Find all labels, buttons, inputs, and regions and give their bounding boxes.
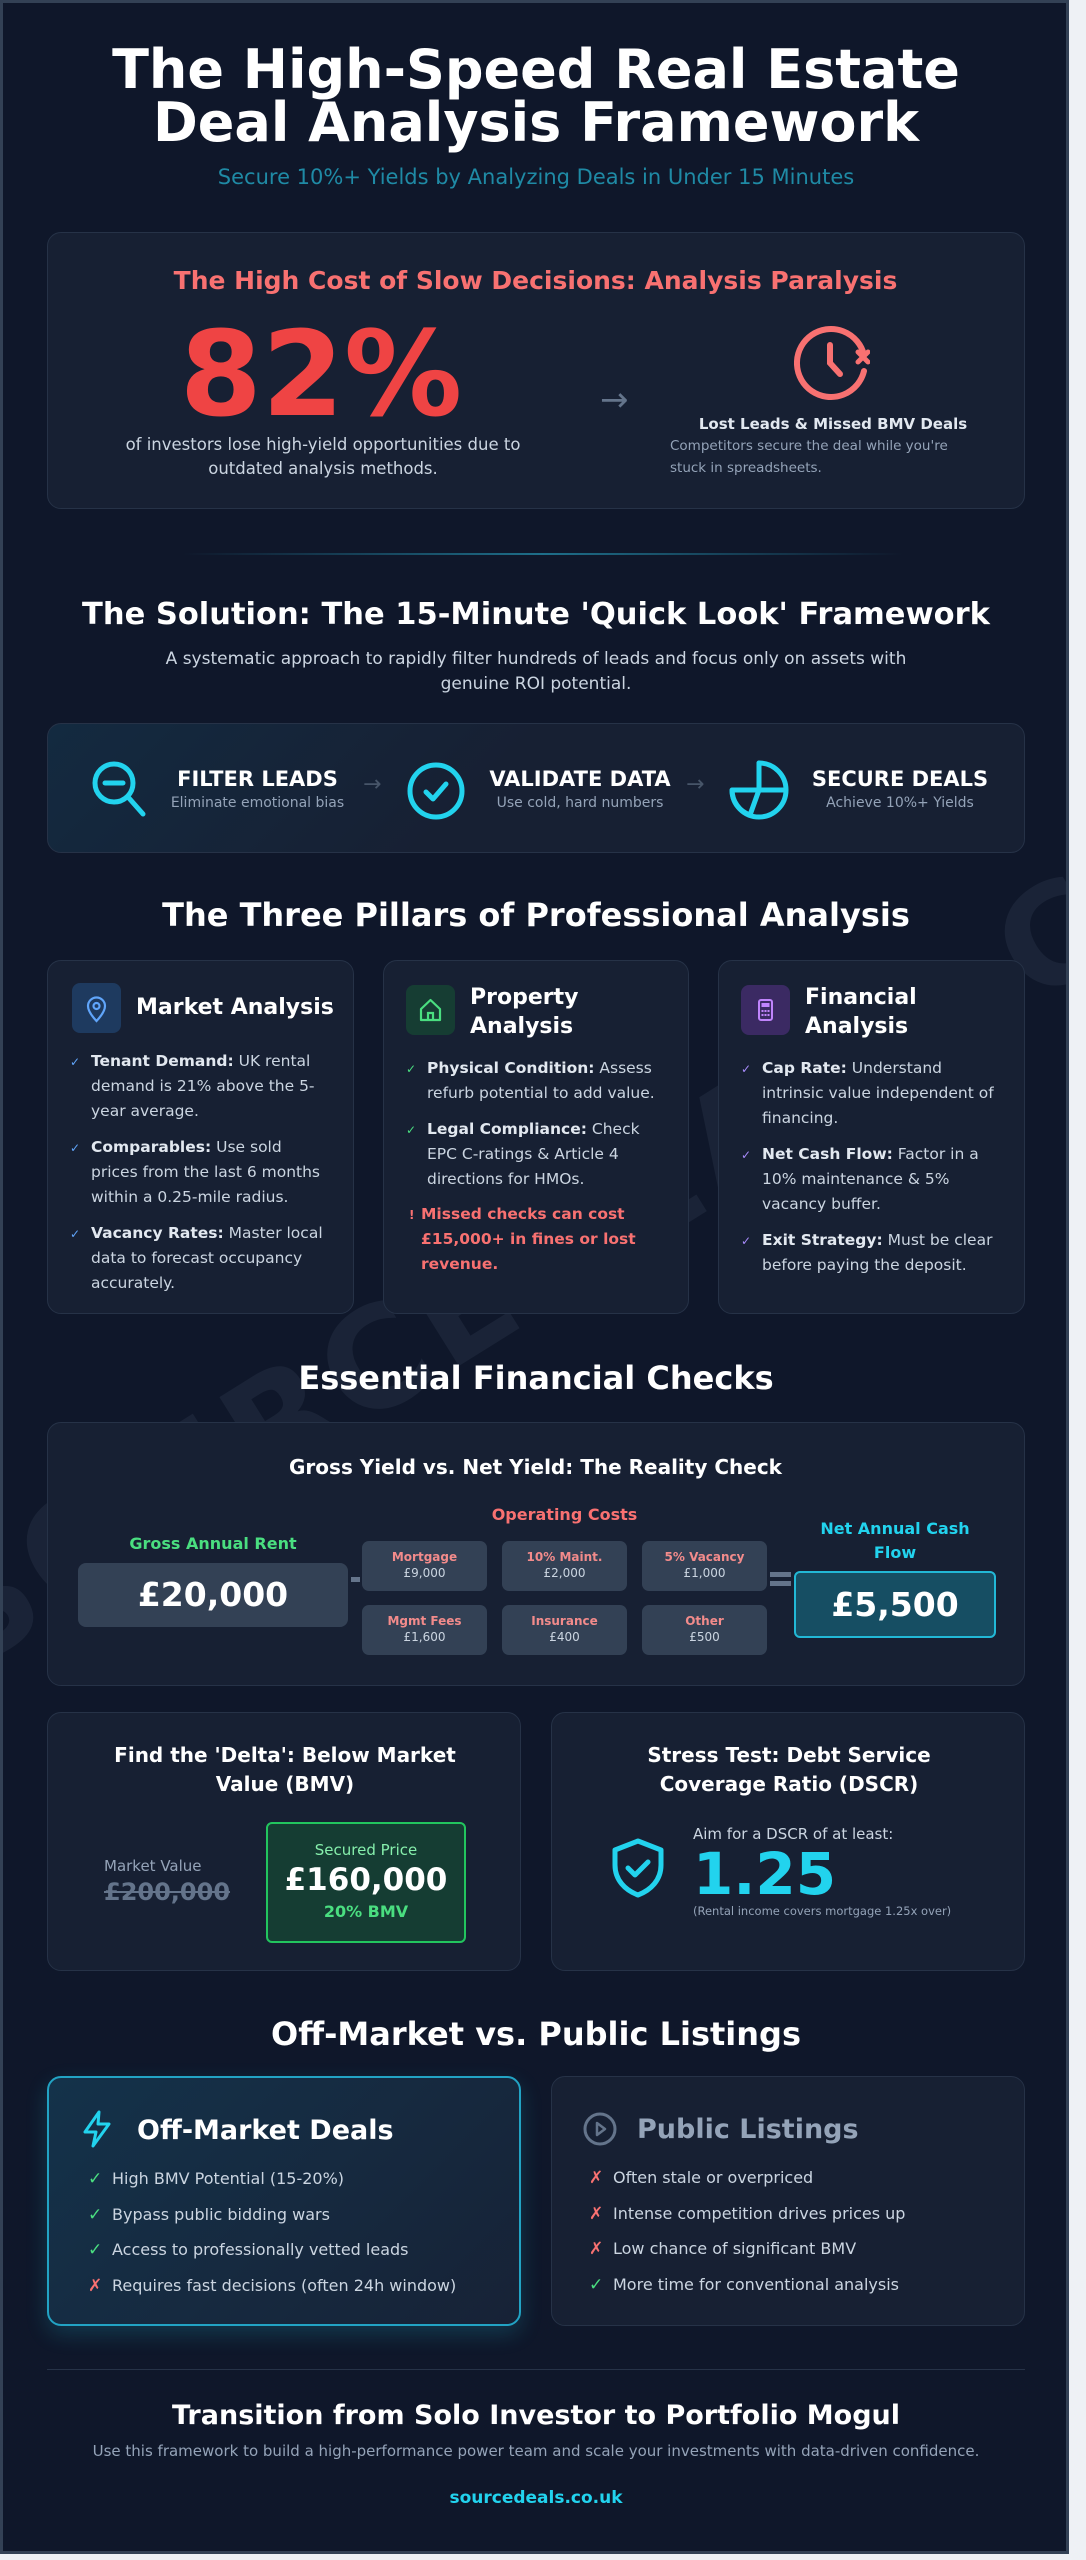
step: validate data: Use cold, hard numbers xyxy=(497,795,663,811)
list items xyxy=(406,1059,655,1273)
step: filter leads: Eliminate emotional bias xyxy=(171,795,344,811)
panel: public listings xyxy=(551,2076,1025,2326)
panel: analysis paralysis xyxy=(47,232,1025,509)
title xyxy=(112,38,960,154)
panel heading: Find the 'Delta': Below Market Value (BMV) xyxy=(114,1743,456,1796)
icon: shield xyxy=(612,1838,664,1898)
panel: DSCR xyxy=(551,1712,1025,1971)
operating cost grid: 5% Vacancy xyxy=(665,1550,744,1564)
step: secure deals: Achieve 10%+ Yields xyxy=(826,795,974,811)
stat caption: of investors lose high-yield opportunities due to outdated analysis methods. xyxy=(126,435,520,478)
icon: search xyxy=(92,762,146,816)
list: Often stale or overpriced xyxy=(613,2168,813,2187)
panel: off-market deals: ✓ xyxy=(88,2169,102,2189)
footer heading: Transition from Solo Investor to Portfolio Mogul xyxy=(172,2400,900,2431)
panel heading: Gross Yield vs. Net Yield: The Reality Check xyxy=(289,1455,782,1479)
panel: off-market deals xyxy=(47,2076,521,2326)
gross annual rent: Gross Annual Rent xyxy=(129,1534,297,1553)
list items: Tenant Demand: UK rental demand is 21% above the 5-year average. xyxy=(91,1052,315,1120)
panel: public listings: ✗ xyxy=(589,2204,603,2224)
DSCR value: (Rental income covers mortgage 1.25x over) xyxy=(693,1904,951,1918)
arrow: → xyxy=(600,380,628,420)
secured price box xyxy=(266,1822,466,1943)
list xyxy=(589,2168,905,2295)
pillar title: Analysis xyxy=(470,1014,573,1039)
list items: Exit Strategy: Must be clear before paying the deposit. xyxy=(762,1231,992,1274)
panel: gross vs net yield xyxy=(47,1422,1025,1686)
solution description: A systematic approach to rapidly filter hundreds of leads and focus only on assets with genuine ROI potential. xyxy=(166,649,906,694)
step: validate data: VALIDATE DATA xyxy=(489,767,671,791)
DSCR value: 1.25 xyxy=(693,1840,836,1908)
card title: Public Listings xyxy=(637,2114,859,2145)
list items: Legal Compliance: Check EPC C-ratings & Article 4 directions for HMOs. xyxy=(427,1120,640,1188)
minus sign xyxy=(351,1577,360,1582)
panel: financial analysis xyxy=(718,960,1025,1314)
title: The High-Speed Real Estate xyxy=(112,38,960,101)
net annual cash flow: Flow xyxy=(874,1543,916,1562)
lost leads text xyxy=(670,415,967,476)
secured price box: £160,000 xyxy=(285,1862,447,1898)
list items: Net Cash Flow: Factor in a 10% maintenance & 5% vacancy buffer. xyxy=(762,1145,979,1213)
panel: property analysis: ✓ xyxy=(406,1062,416,1076)
heading: high cost: The High Cost of Slow Decisions: Analysis Paralysis xyxy=(174,266,897,295)
heading: solution: The Solution: The 15-Minute 'Quick Look' Framework xyxy=(82,597,990,632)
step: secure deals: SECURE DEALS xyxy=(812,767,988,791)
market value: Market Value xyxy=(104,1857,202,1875)
gross annual rent: £20,000 xyxy=(138,1575,288,1614)
net annual cash flow xyxy=(794,1519,996,1638)
pillar title: Financial xyxy=(805,985,917,1010)
heading: three pillars: The Three Pillars of Professional Analysis xyxy=(162,896,910,934)
panel heading: Stress Test: Debt Service Coverage Ratio (DSCR) xyxy=(647,1743,931,1796)
icon: location xyxy=(72,983,121,1033)
step: secure deals xyxy=(812,767,988,811)
icon: pie xyxy=(730,760,788,820)
panel: market analysis: ✓ xyxy=(70,1055,80,1069)
icon: clock xyxy=(794,326,870,400)
panel: process steps xyxy=(47,723,1025,853)
divider xyxy=(47,2369,1025,2370)
panel: off-market deals: ✓ xyxy=(88,2205,102,2225)
panel: property analysis: ! xyxy=(409,1208,414,1222)
lost leads text: Competitors secure the deal while you're stuck in spreadsheets. xyxy=(670,438,948,476)
equals sign xyxy=(770,1572,791,1586)
secured price box: Secured Price xyxy=(315,1841,417,1859)
pillar title: Analysis xyxy=(805,1014,908,1039)
list items: Vacancy Rates: Master local data to forecast occupancy accurately. xyxy=(91,1224,323,1292)
operating cost grid: £500 xyxy=(689,1630,720,1644)
panel: public listings: ✓ xyxy=(589,2275,603,2295)
list items: Cap Rate: Understand intrinsic value independent of financing. xyxy=(762,1059,994,1127)
operating cost grid: £1,000 xyxy=(684,1566,726,1580)
subtitle: Secure 10%+ Yields by Analyzing Deals in Under 15 Minutes xyxy=(218,165,854,189)
panel: market analysis xyxy=(47,960,354,1314)
arrow: → xyxy=(363,772,381,797)
arrow: → xyxy=(686,772,704,797)
list items: Missed checks can cost £15,000+ in fines or lost revenue. xyxy=(421,1205,636,1273)
list items: Comparables: Use sold prices from the last 6 months within a 0.25-mile radius. xyxy=(91,1138,320,1206)
operating cost grid: Other xyxy=(685,1614,724,1628)
icon: calculator xyxy=(741,985,790,1035)
list items xyxy=(70,1052,323,1292)
icon: house xyxy=(406,985,455,1035)
step: filter leads xyxy=(171,767,344,811)
gross annual rent xyxy=(78,1534,348,1627)
panel: public listings: ✗ xyxy=(589,2239,603,2259)
footer link: sourcedeals.co.uk xyxy=(449,2488,623,2508)
list: High BMV Potential (15-20%) xyxy=(112,2169,344,2188)
pillar title: Property xyxy=(470,985,578,1010)
pillar title: Market Analysis xyxy=(136,995,334,1020)
panel: off-market deals: ✗ xyxy=(88,2276,102,2296)
panel: financial analysis: ✓ xyxy=(741,1234,751,1248)
list: More time for conventional analysis xyxy=(613,2275,899,2294)
panel: market analysis: ✓ xyxy=(70,1227,80,1241)
secured price box: 20% BMV xyxy=(324,1902,408,1921)
icon: check circle xyxy=(408,762,464,820)
footer text: Use this framework to build a high-performance power team and scale your investments with data-driven confidence. xyxy=(93,2442,979,2460)
operating cost grid: Insurance xyxy=(531,1614,598,1628)
operating cost grid: £2,000 xyxy=(544,1566,586,1580)
net annual cash flow: £5,500 xyxy=(831,1585,959,1624)
stat 82%: 82% xyxy=(180,305,462,443)
operating cost grid xyxy=(362,1541,767,1655)
list: Low chance of significant BMV xyxy=(613,2239,856,2258)
panel: BMV delta xyxy=(47,1712,521,1971)
DSCR value: Aim for a DSCR of at least: xyxy=(693,1825,893,1843)
heading: essential financial checks: Essential Financial Checks xyxy=(298,1359,774,1397)
panel: financial analysis: ✓ xyxy=(741,1062,751,1076)
DSCR value xyxy=(693,1825,951,1918)
operating cost grid: Mgmt Fees xyxy=(387,1614,462,1628)
icon: play circle xyxy=(584,2112,616,2146)
net annual cash flow: Net Annual Cash xyxy=(820,1519,970,1538)
list: Intense competition drives prices up xyxy=(613,2204,905,2223)
lost leads text: Lost Leads & Missed BMV Deals xyxy=(699,415,967,433)
title: Deal Analysis Framework xyxy=(153,91,919,154)
list items xyxy=(741,1059,994,1274)
operating cost grid: Mortgage xyxy=(392,1550,457,1564)
panel: public listings: ✗ xyxy=(589,2168,603,2188)
panel: market analysis: ✓ xyxy=(70,1141,80,1155)
panel: off-market deals: ✓ xyxy=(88,2240,102,2260)
operating cost grid: £1,600 xyxy=(404,1630,446,1644)
operating cost grid: £400 xyxy=(549,1630,580,1644)
panel: financial analysis: ✓ xyxy=(741,1148,751,1162)
market value xyxy=(104,1857,230,1906)
list: Bypass public bidding wars xyxy=(112,2205,330,2224)
icon: lightning xyxy=(83,2110,111,2148)
panel: property analysis: ✓ xyxy=(406,1123,416,1137)
list: Requires fast decisions (often 24h window) xyxy=(112,2276,456,2295)
pillar title xyxy=(805,985,917,1039)
panel: property analysis xyxy=(383,960,689,1314)
operating cost grid: £9,000 xyxy=(404,1566,446,1580)
heading: off-market vs public: Off-Market vs. Public Listings xyxy=(271,2015,801,2053)
market value: £200,000 xyxy=(104,1878,230,1906)
list: Access to professionally vetted leads xyxy=(112,2240,408,2259)
step: validate data xyxy=(489,767,671,811)
step: filter leads: FILTER LEADS xyxy=(177,767,338,791)
divider xyxy=(183,553,903,555)
list items: Physical Condition: Assess refurb potential to add value. xyxy=(427,1059,655,1102)
list xyxy=(88,2169,456,2296)
pillar title xyxy=(470,985,578,1039)
card title: Off-Market Deals xyxy=(137,2115,394,2146)
operating cost grid: 10% Maint. xyxy=(527,1550,602,1564)
operating costs label: Operating Costs xyxy=(492,1505,637,1524)
